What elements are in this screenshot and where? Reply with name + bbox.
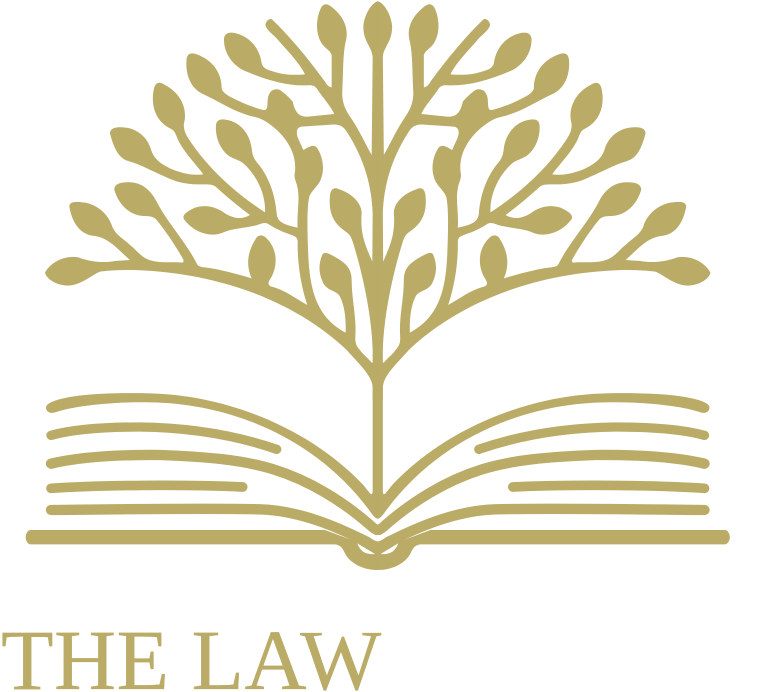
left half of tree and book — [26, 1, 379, 570]
right half of tree and book — [377, 1, 730, 570]
tree and book emblem — [26, 1, 730, 570]
